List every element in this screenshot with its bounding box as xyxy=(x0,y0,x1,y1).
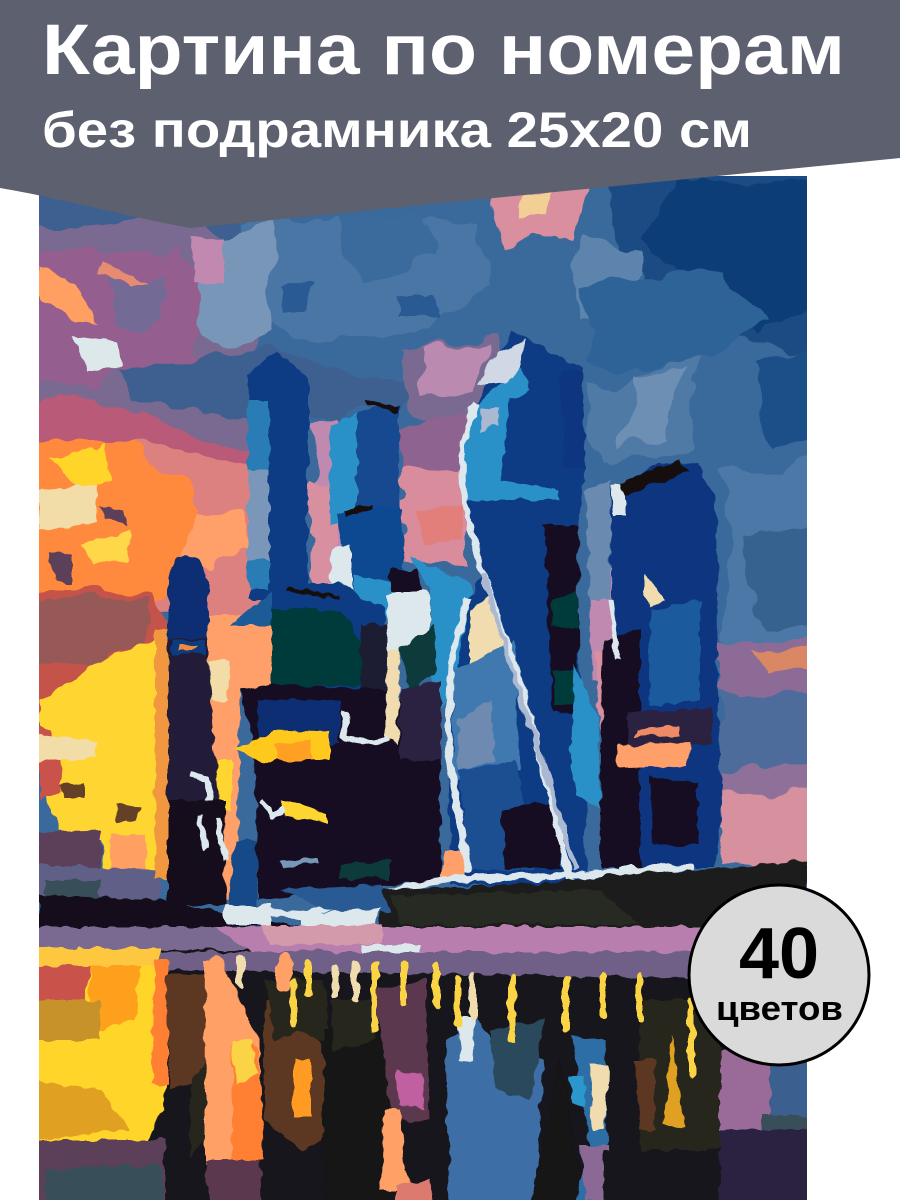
left dark tower xyxy=(166,555,220,802)
sky details xyxy=(39,180,625,925)
mid tower xyxy=(330,405,399,520)
header banner xyxy=(0,0,900,228)
shoreline xyxy=(39,860,807,935)
tall tower xyxy=(248,350,308,600)
right tower xyxy=(600,462,722,868)
badge: 40 colours: 40 xyxy=(739,914,819,994)
light reflections xyxy=(218,958,691,1075)
white outlines of towers xyxy=(190,403,695,915)
left roof and green block xyxy=(230,590,272,625)
buildings xyxy=(168,332,722,905)
dark lower block xyxy=(240,684,441,900)
cyan building behind xyxy=(410,556,472,720)
badge: 40 colours xyxy=(689,885,869,1065)
subtitle: без подрамника 25х20 см xyxy=(42,102,752,158)
badge: 40 colours: цветов xyxy=(716,990,843,1028)
water xyxy=(30,925,820,1200)
white-grey tower xyxy=(386,589,432,662)
painting: Moscow City skyline at sunset xyxy=(20,160,830,1200)
title: Картина по номерам xyxy=(42,11,845,90)
sky clouds xyxy=(20,160,830,880)
evolution tower xyxy=(448,332,590,885)
